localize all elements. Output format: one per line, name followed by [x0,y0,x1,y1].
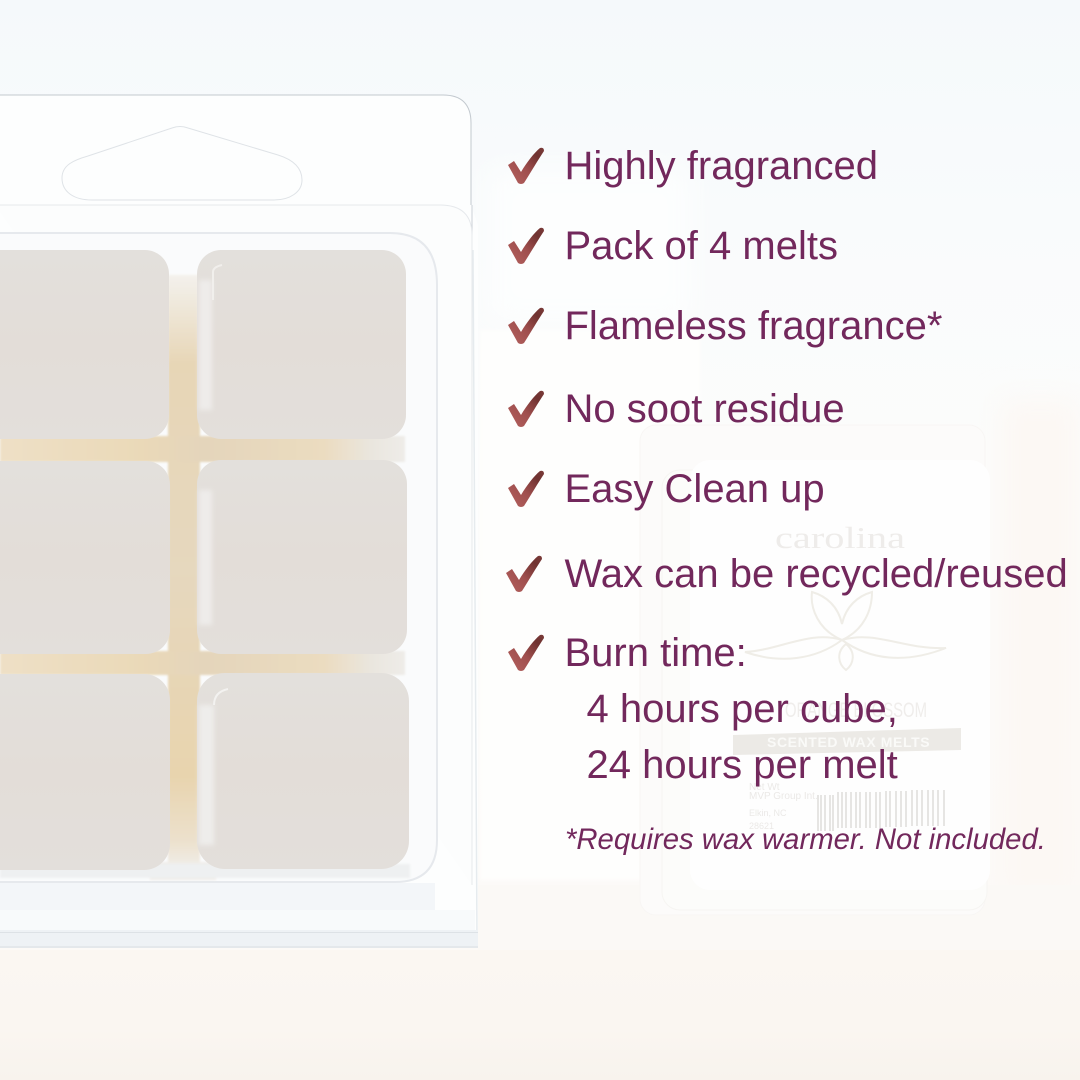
item: Easy Clean up: Easy Clean up [564,467,825,511]
package brand name: carolina [775,520,905,555]
item: Pack of 4 melts: Pack of 4 melts [564,224,838,268]
package floral emblem [745,592,946,670]
flange [0,205,472,885]
blister cavity [0,233,437,882]
wax cube row 3 left [0,674,170,870]
amber wax tray [0,275,410,880]
package barcode [818,790,944,831]
wax cube row 1 right [197,250,406,439]
wax cube row 1 left [0,250,169,439]
item: No soot residue: No soot residue [564,387,845,431]
package scent name: ORANGE BLOSSOM [785,699,927,722]
wax cube row 2 right [197,460,407,654]
package small print: 28621 [749,821,774,831]
package small print: Net Wt [749,782,780,793]
feature checklist [506,144,1068,787]
item: Flameless fragrance: Flameless fragrance* [564,304,942,348]
hang hole [62,126,302,200]
item: Burn time: 24 hours per melt [586,743,898,787]
item: Burn time: 4 hours per cube, [586,687,898,731]
footnote: *Requires wax warmer. Not included. [565,823,1046,856]
package small print: Elkin, NC [749,808,787,818]
blister bottom flange [0,883,435,910]
item: Burn time [508,631,898,787]
package small print: MVP Group Int. [749,791,818,802]
clamshell wax melt pack [0,95,478,948]
outer card [0,95,478,948]
wax cube row 2 left [0,461,170,654]
background product: wax melt package [640,425,990,915]
package label band: SCENTED WAX MELTS [767,734,930,750]
package label band [733,728,961,755]
item: Wax can be recycled/reused: Wax can be recycled/reused [564,552,1068,596]
package small print [749,782,818,831]
item: Highly fragranced: Highly fragranced [564,144,878,188]
wax cube row 3 right [197,673,409,869]
item: Burn time: Burn time: [564,631,747,675]
